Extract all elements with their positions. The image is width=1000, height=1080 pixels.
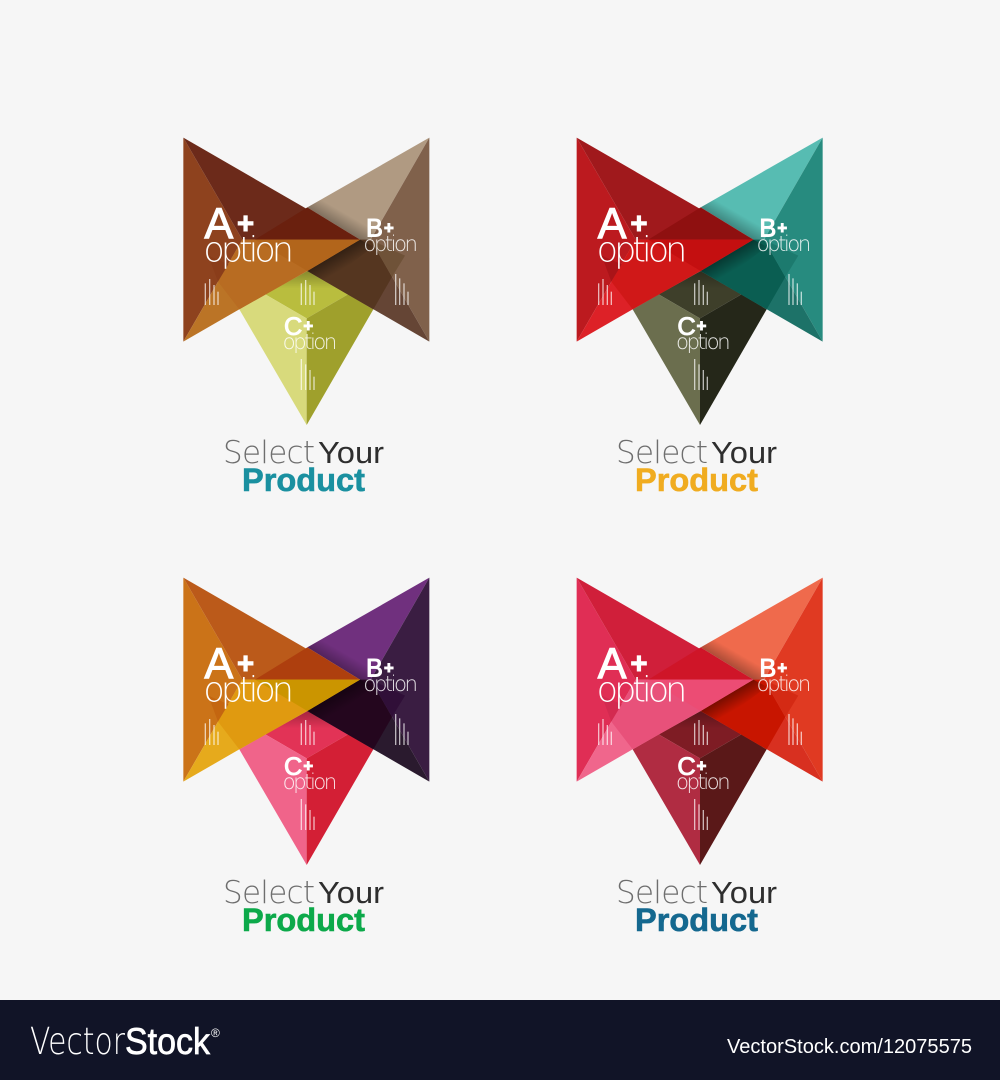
label A: + [237, 208, 254, 241]
label C: option [283, 770, 337, 795]
label C [283, 313, 337, 355]
bar icons [205, 714, 409, 830]
heading: top left: Product [242, 462, 365, 498]
label B [757, 215, 811, 257]
heading: bottom left: Your [318, 875, 384, 910]
label C: option [676, 330, 731, 355]
heading: bottom left: Product [242, 902, 365, 938]
heading: top right: Product [635, 462, 758, 498]
label A: A [204, 640, 233, 688]
bar icons [205, 274, 409, 390]
label C: option [283, 330, 337, 355]
triangle B [701, 138, 823, 342]
label C: + [303, 317, 313, 336]
label C [676, 753, 731, 795]
label B [363, 215, 418, 257]
label A [597, 640, 687, 711]
label A: + [630, 208, 647, 241]
footer logo: Stock [125, 1021, 210, 1062]
label A: option [203, 231, 294, 271]
label B: B [366, 655, 383, 683]
label C: C [284, 753, 302, 781]
label A [203, 200, 294, 271]
label A: option [597, 671, 687, 711]
label B: option [363, 672, 418, 697]
label C [283, 753, 337, 795]
triangle C [239, 711, 373, 865]
label A: + [630, 648, 647, 681]
label B: option [757, 672, 811, 697]
triangle B [701, 578, 823, 782]
label C: + [697, 317, 707, 336]
label B: + [384, 219, 394, 238]
heading: top right: Select [616, 435, 708, 471]
panel: crimson and coral bow shape [577, 578, 823, 865]
label B [363, 655, 418, 697]
label B: option [757, 232, 811, 257]
panel: brown and olive bow shape [183, 138, 429, 425]
label B: B [366, 215, 383, 243]
heading: bottom left [223, 875, 384, 938]
footer logo [30, 1020, 220, 1063]
triangle B [307, 138, 429, 342]
triangle A [183, 138, 360, 342]
label C: C [677, 753, 696, 781]
label B: + [777, 219, 787, 238]
label C: + [303, 757, 313, 776]
heading: top right: Your [711, 435, 777, 470]
label A: + [237, 648, 254, 681]
heading: top right [616, 435, 777, 498]
label C: + [697, 757, 707, 776]
triangle A [577, 138, 753, 342]
heading: top left: Your [318, 435, 384, 470]
label B: + [384, 659, 394, 678]
heading: top left [223, 435, 384, 498]
label A: option [597, 231, 687, 271]
bar icons [598, 714, 802, 830]
heading: bottom right: Your [711, 875, 777, 910]
footer logo: Vector [30, 1020, 126, 1063]
panel: orange and purple bow shape [183, 578, 429, 865]
label A: option [203, 671, 294, 711]
panel: red and teal bow shape [577, 138, 823, 425]
label C: C [677, 313, 696, 341]
bar icons [598, 274, 802, 390]
label B: option [363, 232, 418, 257]
triangle A [577, 578, 753, 782]
heading: bottom right [616, 875, 777, 938]
label C [676, 313, 731, 355]
heading: bottom right: Select [616, 875, 708, 911]
heading: bottom right: Product [635, 902, 758, 938]
triangle A [183, 578, 360, 782]
label C: C [284, 313, 302, 341]
label A [597, 200, 687, 271]
footer bar [0, 1000, 1000, 1080]
label A [203, 640, 294, 711]
label B [757, 655, 811, 697]
heading: bottom left: Select [223, 875, 315, 911]
triangle C [633, 271, 767, 425]
label B: + [777, 659, 787, 678]
label A: A [598, 200, 627, 248]
heading: top left: Select [223, 435, 315, 471]
triangle B [307, 578, 429, 782]
footer image id: VectorStock.com/12075575 [727, 1036, 972, 1058]
label A: A [204, 200, 233, 248]
label B: B [759, 655, 776, 683]
triangle C [633, 711, 767, 865]
footer logo: ® [211, 1026, 220, 1040]
triangle C [239, 271, 373, 425]
label C: option [676, 770, 731, 795]
label A: A [598, 640, 627, 688]
label B: B [759, 215, 776, 243]
